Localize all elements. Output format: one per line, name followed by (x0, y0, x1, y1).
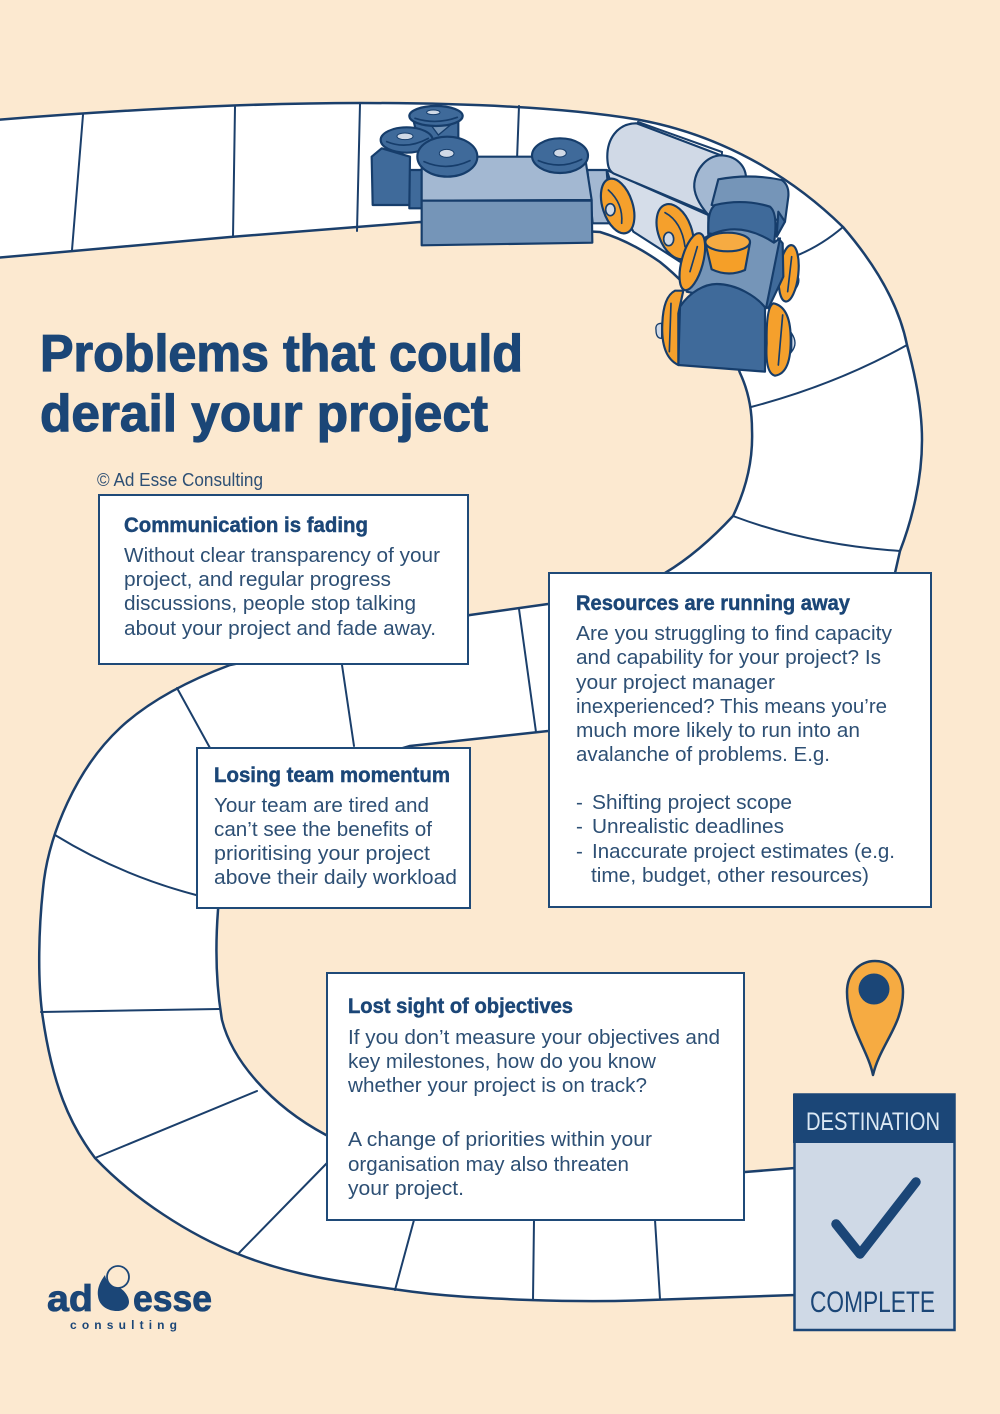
tanker carriage (587, 123, 746, 264)
text block: communication: project, and regular progress (124, 568, 391, 591)
text block: communication: about your project and fade away. (124, 617, 436, 640)
title: derail your project (40, 385, 488, 443)
text block: momentum: can’t see the benefits of (214, 818, 432, 841)
heading: objectives: Lost sight of objectives (348, 995, 573, 1018)
heading: momentum: Losing team momentum (214, 764, 450, 787)
heading: resources: Resources are running away (576, 592, 850, 615)
text block: communication: discussions, people stop talking (124, 592, 416, 615)
icon: map pin (847, 961, 903, 1075)
panel: communication is fading (99, 495, 468, 664)
text block: resources: time, budget, other resources) (591, 864, 869, 887)
text block: resources: Are you struggling to find capacity (576, 622, 893, 645)
text block: objectives: organisation may also threaten (348, 1153, 629, 1176)
panel: resources are running away (549, 573, 931, 907)
logo: ad esse consulting: consulting (70, 1318, 177, 1332)
text block: resources: your project manager (576, 671, 775, 694)
text block: resources: Shifting project scope (592, 791, 792, 814)
text block: momentum: prioritising your project (214, 842, 430, 865)
text block: momentum (214, 794, 457, 889)
title: Problems that could (40, 325, 523, 383)
derailed train (372, 106, 801, 376)
text block: resources: avalanche of problems. E.g. (576, 743, 830, 766)
text block: resources: Inaccurate project estimates (e.g. (592, 840, 895, 863)
text block: momentum: above their daily workload (214, 866, 457, 889)
text block: resources: inexperienced? This means you’re (576, 695, 887, 718)
label: complete: COMPLETE (810, 1286, 935, 1319)
logo: ad esse consulting: ad (47, 1278, 93, 1319)
label: destination: DESTINATION (806, 1108, 940, 1136)
heading: communication: Communication is fading (124, 514, 368, 537)
text block: resources: - (576, 791, 583, 814)
text block: resources: - (576, 840, 583, 863)
icon: check mark (836, 1182, 916, 1254)
copyright note: © Ad Esse Consulting (97, 470, 263, 490)
text block: objectives: your project. (348, 1177, 464, 1200)
text block: communication: Without clear transparency of your (124, 544, 440, 567)
text block: communication (124, 544, 440, 640)
title (40, 325, 523, 443)
text block: momentum: Your team are tired and (214, 794, 429, 817)
text block: resources: and capability for your project? Is (576, 646, 881, 669)
logo: ad esse consulting: esse (133, 1278, 212, 1319)
text block: objectives: A change of priorities within your (348, 1128, 652, 1151)
panel: losing team momentum (197, 748, 470, 908)
text block: resources: much more likely to run into an (576, 719, 860, 742)
text block: objectives: If you don’t measure your objectives and (348, 1026, 720, 1049)
text block: resources: - (576, 815, 583, 838)
text block: resources: Unrealistic deadlines (592, 815, 784, 838)
text block: resources (576, 622, 895, 887)
brick carriage (417, 137, 592, 245)
text block: objectives: key milestones, how do you know (348, 1050, 656, 1073)
text block: objectives (347, 1026, 720, 1200)
panel: destination sign (793, 1094, 955, 1330)
logo: ad esse consulting (47, 1266, 212, 1332)
panel: lost sight of objectives (327, 973, 744, 1220)
winding road (0, 103, 922, 1301)
back carriage (372, 106, 463, 208)
text block: objectives: whether your project is on track? (347, 1074, 647, 1097)
icon: logo drop (98, 1266, 129, 1311)
locomotive (656, 176, 801, 376)
